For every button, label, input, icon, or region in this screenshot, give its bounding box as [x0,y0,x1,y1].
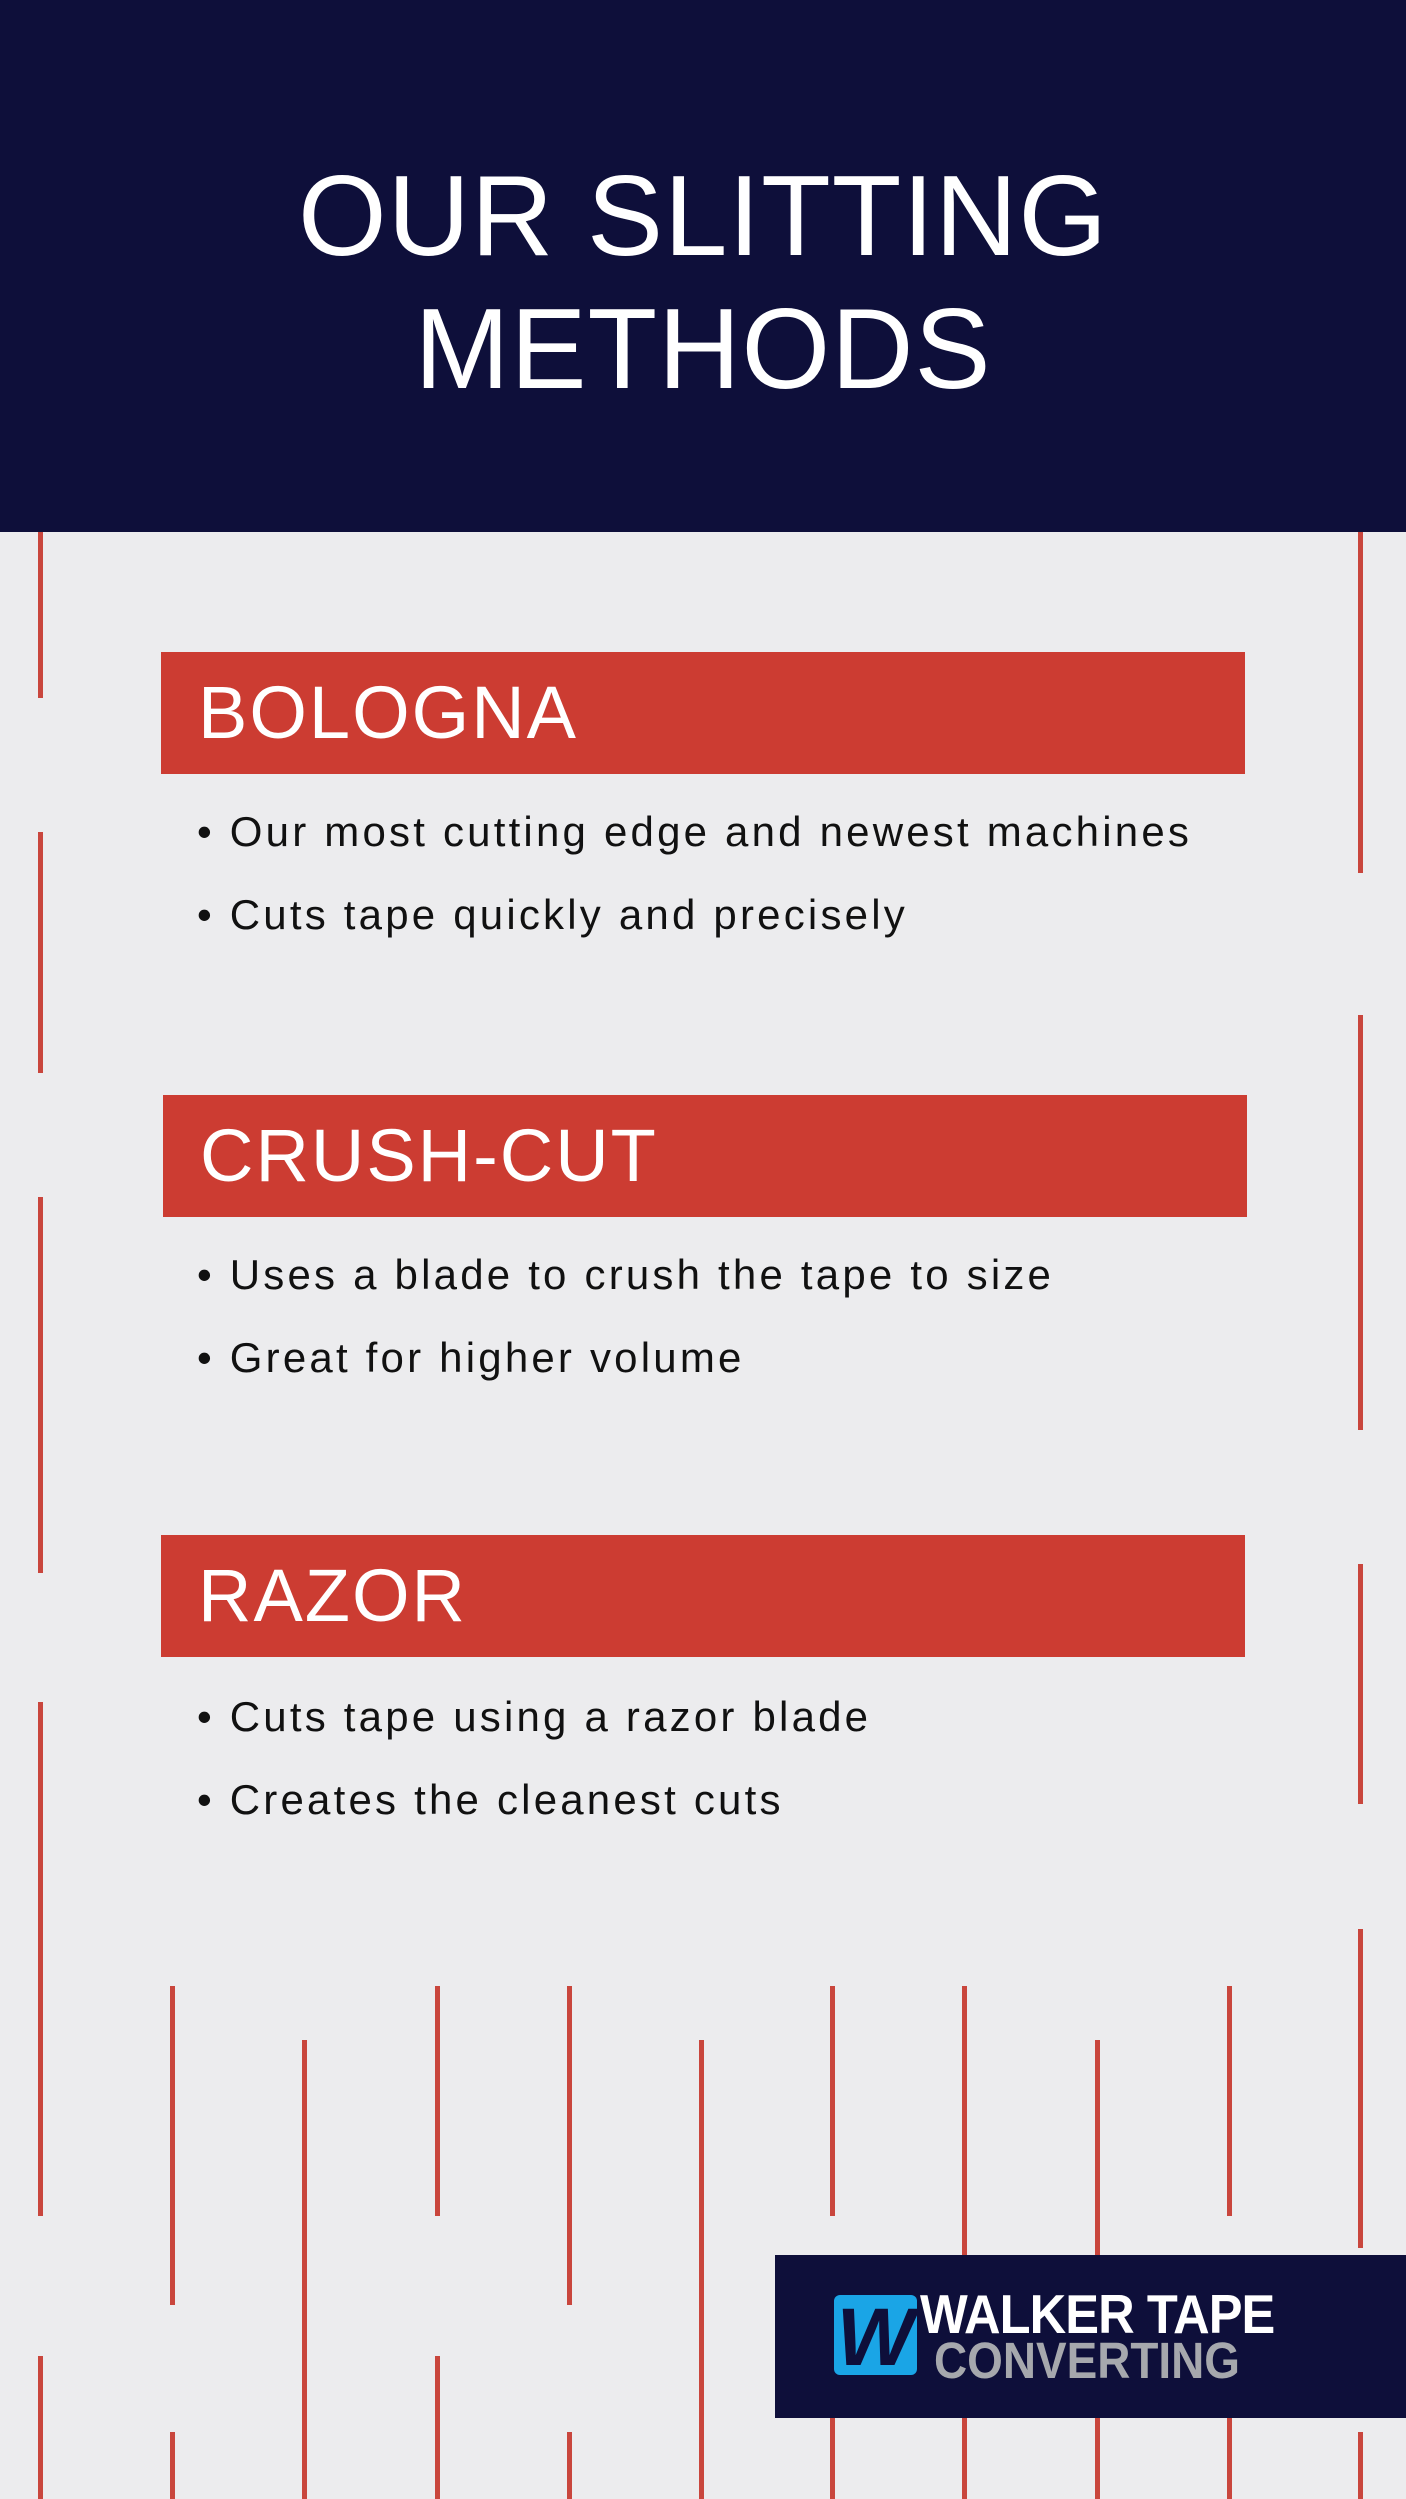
header [0,0,1406,532]
bologna bullets: • Our most cutting edge and newest machines [197,808,1192,855]
section: razor heading: RAZOR [198,1554,467,1637]
crush-cut bullets [197,1251,1054,1381]
title: METHODS [414,286,992,413]
logo [775,2255,1406,2418]
bologna bullets: • Cuts tape quickly and precisely [197,891,908,938]
title: OUR SLITTING [298,153,1108,280]
logo text: WALKER TAPE [920,2283,1274,2345]
decorative lines [38,532,1363,2499]
razor bullets: • Creates the cleanest cuts [197,1776,784,1823]
section: crush-cut heading [163,1095,1247,1217]
bologna bullets [197,808,1192,938]
section: razor heading [161,1535,1245,1657]
razor bullets: • Cuts tape using a razor blade [197,1693,871,1740]
razor bullets [197,1693,871,1823]
section: crush-cut heading: CRUSH-CUT [200,1114,658,1197]
title [298,153,1108,413]
section: bologna heading [161,652,1245,774]
crush-cut bullets: • Great for higher volume [197,1334,745,1381]
section: bologna heading: BOLOGNA [198,671,578,754]
logo text [920,2283,1274,2389]
logo text: CONVERTING [934,2332,1240,2389]
crush-cut bullets: • Uses a blade to crush the tape to size [197,1251,1054,1298]
